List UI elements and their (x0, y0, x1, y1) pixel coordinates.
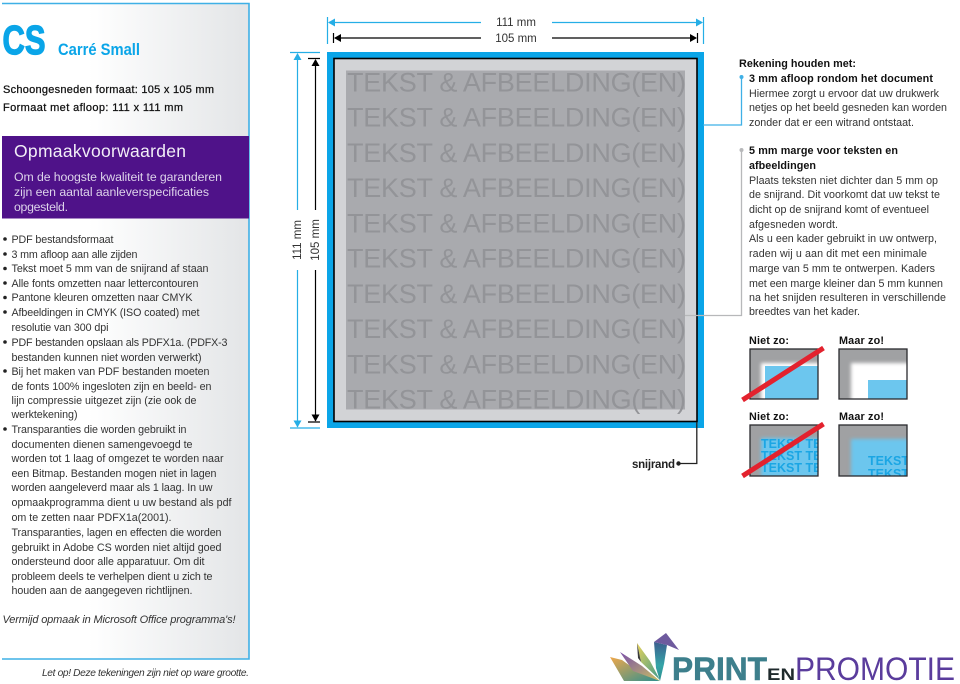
logo: Print en Promotie (610, 633, 955, 684)
text block: bleed note (739, 58, 947, 129)
text block: bleed note: 3 mm afloop rondom het document (749, 73, 933, 85)
placeholder text rows (347, 68, 686, 414)
placeholder text rows: TEKST & AFBEELDING(EN) (347, 244, 686, 274)
text block: bleed note: netjes op het beeld gesneden kan worden (749, 102, 947, 114)
vertical dimensions: 105 mm (310, 219, 322, 261)
text block: margin note: afgesneden wordt. (749, 219, 838, 231)
bullet list: Transparanties, lagen en effecten die worden (12, 527, 222, 539)
banner: Opmaakvoorwaarden (2, 136, 249, 218)
bullet list: lijn compressie uitgezet zijn (zie ook de (12, 395, 197, 407)
banner: Opmaakvoorwaarden: zijn een aantal aanleverspecificaties (14, 185, 209, 199)
document square with bleed (327, 52, 704, 428)
placeholder text rows: TEKST & AFBEELDING(EN) (347, 173, 686, 203)
placeholder text rows: TEKST & AFBEELDING(EN) (347, 102, 686, 132)
connector: margin note (685, 148, 744, 316)
bullet list: houden aan de aangegeven richtlijnen. (12, 585, 192, 597)
bullet list: PDF bestanden opslaan als PDFX1a. (PDFX-3 (12, 337, 228, 349)
bullet list: Transparanties die worden gebruikt in (12, 424, 187, 436)
title: CS Carré Small: CS (2, 17, 46, 63)
placeholder text rows: TEKST & AFBEELDING(EN) (347, 208, 686, 238)
bullet list: Alle fonts omzetten naar lettercontouren (12, 278, 199, 290)
bullet list: documenten dienen samengevoegd te (12, 439, 193, 451)
title: CS Carré Small (2, 17, 140, 63)
horizontal dimensions: 111 mm (496, 17, 536, 29)
footnote: Let op! Deze tekeningen zijn niet op ware grootte. (42, 668, 249, 679)
bullet list: Tekst moet 5 mm van de snijrand af staan (12, 263, 209, 275)
text block: margin note: afbeeldingen (749, 160, 816, 172)
placeholder text rows: TEKST & AFBEELDING(EN) (347, 314, 686, 344)
example labels: Niet zo: (749, 411, 789, 423)
bullet list: ondersteund door alle apparatuur. Om dit (12, 556, 205, 568)
callout: snijrand (632, 422, 697, 471)
placeholder text rows: TEKST & AFBEELDING(EN) (347, 350, 686, 380)
text block: margin note: met een marge kleiner dan 5 mm kunnen (749, 278, 943, 290)
bullet list: bestanden kunnen niet worden verwerkt) (12, 352, 202, 364)
example labels: Niet zo: (749, 335, 789, 347)
example labels (749, 335, 884, 423)
banner: Opmaakvoorwaarden: Om de hoogste kwaliteit te garanderen (14, 170, 222, 184)
bullet list: een Bitmap. Bestanden mogen niet in lagen (12, 468, 217, 480)
bullet list: resolutie van 300 dpi (12, 322, 108, 334)
text block: margin note: marge van 5 mm te ontwerpen. Kaders (749, 263, 935, 275)
bullet list: 3 mm afloop aan alle zijden (12, 249, 138, 261)
bullet list (3, 234, 232, 597)
example: correct text: TEKST (868, 454, 909, 468)
format sizes (3, 84, 214, 114)
example: wrong text: TEKST TE (761, 461, 821, 475)
example labels: Maar zo! (839, 335, 884, 347)
example: correct frame (838, 348, 908, 400)
example: correct text (838, 424, 908, 477)
title: CS Carré Small: Carré Small (58, 40, 140, 59)
bullet list: worden tot 1 laag of omgezet te worden naar (10, 453, 224, 465)
text block: margin note (749, 145, 946, 318)
example: wrong frame (741, 346, 825, 402)
text block: margin note: breedtes van het kader. (749, 306, 860, 318)
text block: margin note: Als u een kader gebruikt in uw ontwerp, (749, 233, 937, 245)
format sizes: Schoongesneden formaat: 105 x 105 mm (3, 84, 214, 96)
text block: margin note: 5 mm marge voor teksten en (749, 145, 898, 157)
placeholder text rows: TEKST & AFBEELDING(EN) (347, 138, 686, 168)
example: wrong text (741, 422, 825, 478)
placeholder text rows: TEKST & AFBEELDING(EN) (347, 279, 686, 309)
text block: margin note: de snijrand. Dit voorkomt dat uw tekst te (749, 189, 940, 201)
banner: Opmaakvoorwaarden: opgesteld. (14, 200, 68, 214)
format sizes: Formaat met afloop: 111 x 111 mm (3, 102, 183, 114)
example labels: Maar zo! (839, 411, 884, 423)
text block: margin note: dicht op de snijrand komt of eventueel (749, 204, 929, 216)
bullet list: Afbeeldingen in CMYK (ISO coated) met (12, 307, 200, 319)
horizontal dimensions (328, 17, 704, 45)
text block: margin note: Plaats teksten niet dichter dan 5 mm op (749, 175, 938, 187)
placeholder text rows: TEKST & AFBEELDING(EN) (347, 68, 686, 98)
callout: snijrand: snijrand (632, 459, 675, 471)
horizontal dimensions: 105 mm (495, 33, 537, 45)
text block: bleed note: Rekening houden met: (739, 58, 856, 70)
logo: Print en Promotie: EN (767, 665, 795, 684)
vertical dimensions (290, 52, 322, 428)
example: correct text: TEKST (868, 467, 909, 481)
warning note: Vermijd opmaak in Microsoft Office programma's! (2, 614, 236, 626)
bullet list: probleem deels te verhelpen dient u zich te (12, 571, 213, 583)
example: wrong text: TEKST TE (761, 437, 821, 451)
bullet list: worden aangeleverd maar als 1 laag. In uw (10, 482, 213, 494)
bullet list: werktekening) (10, 409, 78, 421)
placeholder text rows: TEKST & AFBEELDING(EN) (347, 384, 686, 414)
bullet list: gebruikt in Adobe CS worden niet altijd goed (12, 542, 222, 554)
bullet list: opmaakprogramma dient u uw bestand als pdf (12, 497, 232, 509)
panel: left specifications (2, 4, 249, 659)
connector: bleed note (703, 75, 744, 125)
example: wrong text: TEKST TE (761, 449, 821, 463)
bullet list: de fonts 100% ingesloten zijn en beeld- en (12, 381, 212, 393)
bullet list: Bij het maken van PDF bestanden moeten (12, 366, 210, 378)
vertical dimensions: 111 mm (292, 220, 304, 260)
icon: origami bird (610, 633, 679, 681)
text block: margin note: raden wij u aan dit met een minimale (749, 248, 927, 260)
bullet list: Pantone kleuren omzetten naar CMYK (12, 292, 193, 304)
text block: bleed note: zonder dat er een witrand ontstaat. (749, 117, 914, 129)
text block: bleed note: Hiermee zorgt u ervoor dat uw drukwerk (749, 88, 940, 100)
banner: Opmaakvoorwaarden: Opmaakvoorwaarden (14, 141, 186, 161)
bullet list: om te zetten naar PDFX1a(2001). (12, 512, 172, 524)
bullet list: PDF bestandsformaat (12, 234, 114, 246)
text block: margin note: na het snijden resulteren in verschillende (749, 292, 946, 304)
